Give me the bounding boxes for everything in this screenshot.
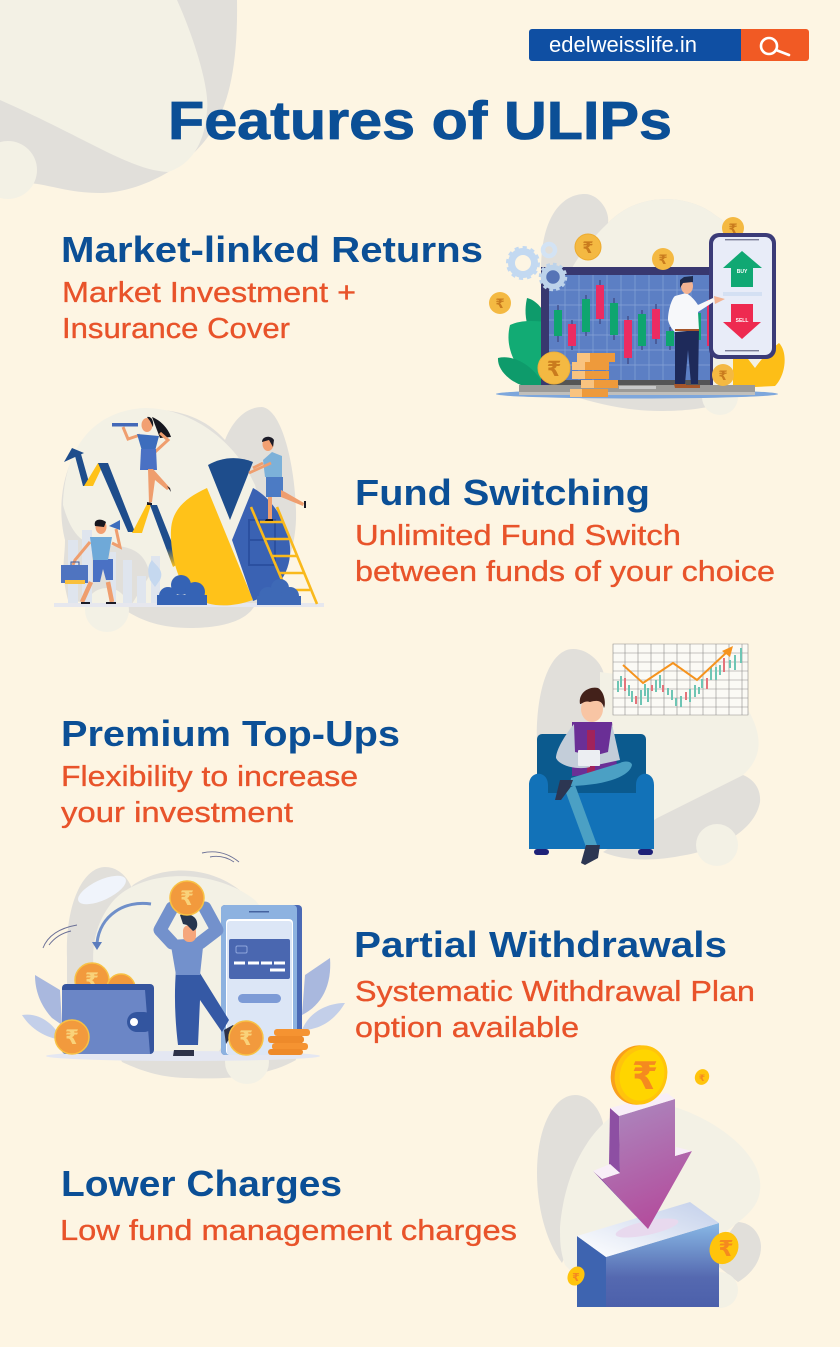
woman with telescope xyxy=(112,417,171,505)
man lifting coin: ₹ xyxy=(180,886,194,910)
panel: market-linked returns xyxy=(61,194,785,415)
heading: market-linked returns: Market-linked Returns xyxy=(61,229,483,270)
leaves xyxy=(498,298,785,388)
coins: ₹ xyxy=(582,238,594,257)
gears xyxy=(508,244,566,290)
man with megaphone xyxy=(61,520,120,603)
title: Features of ULIPs xyxy=(168,91,672,151)
phone with card xyxy=(221,905,302,1055)
illustration: coin and arrow dropping into box xyxy=(537,1038,761,1308)
logo: edelweisslife.in search bar xyxy=(529,29,809,61)
candlesticks xyxy=(554,285,710,358)
coins: ₹ xyxy=(658,253,668,268)
arrow zigzag xyxy=(64,448,180,567)
phone with buy and sell: SELL xyxy=(736,318,748,324)
laptop xyxy=(541,267,713,387)
text: partial withdrawals description: Systematic Withdrawal Plan xyxy=(355,976,755,1008)
panel: lower charges xyxy=(60,1038,761,1308)
phone with buy and sell: BUY xyxy=(737,269,748,275)
motion lines xyxy=(43,852,239,948)
curved arrow xyxy=(92,903,151,950)
man lifting coin xyxy=(160,881,236,1056)
ladder xyxy=(251,507,317,604)
text: fund switching description xyxy=(355,520,775,588)
text: partial withdrawals description: option available xyxy=(355,1012,579,1044)
seated man xyxy=(555,688,632,865)
coins: ₹ xyxy=(728,222,738,237)
pie chart xyxy=(171,458,290,605)
pale city xyxy=(68,530,160,603)
illustration: trading laptop and phone: ₹ xyxy=(718,369,728,384)
leaves xyxy=(22,958,345,1040)
purple arrow xyxy=(593,1093,692,1229)
small coins: ₹ xyxy=(718,1237,734,1262)
logo: edelweisslife.in search bar: edelweisslife.in xyxy=(549,32,697,57)
heading: premium top-ups: Premium Top-Ups xyxy=(61,713,400,754)
heading: partial withdrawals: Partial Withdrawals xyxy=(354,924,727,965)
text: market-linked description xyxy=(62,277,356,345)
wallet: ₹ xyxy=(85,968,99,992)
coin stack xyxy=(570,353,618,397)
illustration: trading laptop and phone xyxy=(489,194,785,415)
illustration: man with wallet, coins and phone xyxy=(22,852,345,1084)
stock chart xyxy=(613,644,748,715)
coins xyxy=(489,217,744,314)
heading: fund switching: Fund Switching xyxy=(355,472,650,513)
phone with buy and sell xyxy=(709,233,776,359)
text: market-linked description: Insurance Cover xyxy=(62,313,290,345)
small coins: ₹ xyxy=(572,1272,580,1284)
coins: ₹ xyxy=(495,297,505,312)
box xyxy=(577,1202,719,1307)
coin stack xyxy=(268,1029,310,1055)
big coin: ₹ xyxy=(632,1054,658,1098)
text: premium top-ups description: your investment xyxy=(61,797,293,829)
small coins xyxy=(564,1067,744,1289)
text: fund switching description: between funds of your choice xyxy=(355,556,775,588)
decorative blob: top left xyxy=(0,0,237,199)
illustration: man with wallet, coins and phone: ₹ xyxy=(239,1026,253,1050)
panel: premium top-ups xyxy=(61,644,760,866)
small coins: ₹ xyxy=(699,1073,705,1083)
text: partial withdrawals description xyxy=(355,976,755,1044)
text: market-linked description: Market Investment + xyxy=(62,277,356,309)
text: premium top-ups description: Flexibility to increase xyxy=(61,761,358,793)
heading: lower charges: Lower Charges xyxy=(61,1163,342,1204)
text: fund switching description: Unlimited Fund Switch xyxy=(355,520,681,552)
text: premium top-ups description xyxy=(61,761,358,829)
text: lower charges description: Low fund management charges xyxy=(60,1215,517,1247)
armchair xyxy=(529,734,654,855)
man pulling pie slice xyxy=(249,437,305,521)
illustration: man in armchair with stock chart xyxy=(529,644,760,866)
large coin xyxy=(538,352,570,384)
illustration: man with wallet, coins and phone: ₹ xyxy=(65,1025,79,1049)
big coin xyxy=(603,1038,675,1112)
businessman xyxy=(668,276,725,388)
panel: fund switching xyxy=(54,407,775,632)
large coin: ₹ xyxy=(547,357,561,381)
panel: partial withdrawals xyxy=(22,852,755,1084)
bushes xyxy=(148,560,301,605)
wallet xyxy=(62,963,154,1054)
illustration: people on rising graph and pie chart xyxy=(54,407,324,632)
